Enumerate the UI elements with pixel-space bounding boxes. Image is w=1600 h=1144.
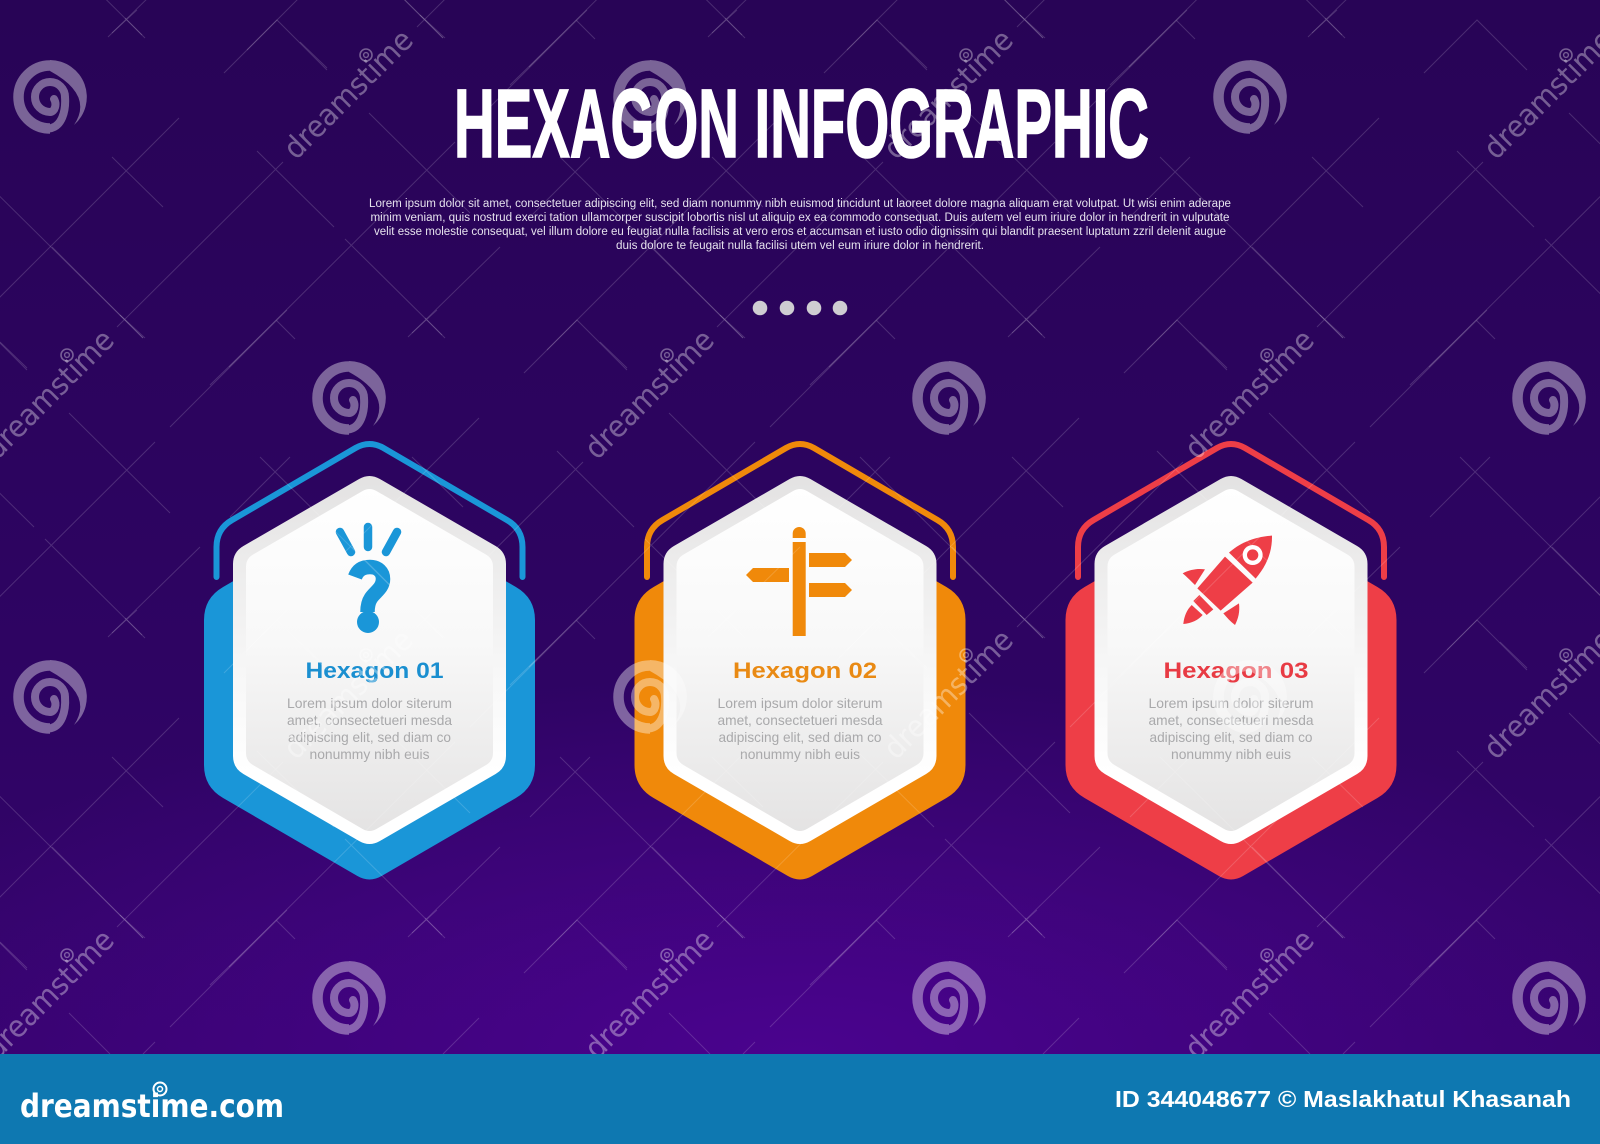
card inner: [676, 489, 924, 831]
intro text block: Lorem ipsum dolor sit amet, consectetuer adipiscing elit, sed diam nonummy nibh euismod tincidunt ut laoreet dolore magna aliquam erat volutpat. Ut wisi enim aderape: [369, 198, 1231, 210]
description: Lorem ipsum dolor siterum: [718, 695, 882, 711]
icon: signpost: [746, 527, 852, 636]
intro text block: minim veniam, quis nostrud exerci tation ullamcorper suscipit lobortis nisl ut aliquip ex ea commodo consequat. Duis autem vel eum iriure dolor in hendrerit in vulputate: [370, 212, 1230, 224]
outline bracket orange: [647, 444, 953, 577]
watermark overlay: dreamstime: [1178, 323, 1321, 466]
intro text block: velit esse molestie consequat, vel illum dolore eu feugiat nulla facilisis at vero eros et accumsan et iusto odio dignissim qui blandit praesent luptatum zzril delenit augue: [374, 226, 1226, 238]
footer logo: dreamstime.com: [20, 1087, 284, 1125]
card inner: [1108, 489, 1354, 831]
card inner: [246, 489, 493, 831]
watermark overlay: dreamstime: [877, 623, 1020, 766]
watermark overlay: dreamstime: [277, 23, 420, 166]
card outer: [233, 476, 506, 844]
intro text block: [369, 198, 1231, 252]
description: Lorem ipsum dolor siterum: [287, 695, 452, 711]
watermark overlay: dreamstime: [277, 623, 420, 766]
back hexagon orange: [634, 506, 966, 880]
heading: Hexagon 01: [306, 658, 444, 683]
description: adipiscing elit, sed diam co: [288, 729, 451, 745]
outline bracket red: [1078, 444, 1384, 577]
description: amet, consectetueri mesda: [1148, 712, 1314, 728]
icon: question mark: [340, 527, 397, 633]
intro text block: duis dolore te feugait nulla facilisi utem vel eum iriure dolor in hendrerit.: [616, 240, 984, 252]
panel: hexagon 02: [634, 444, 966, 880]
heading: Hexagon 03: [1164, 658, 1308, 683]
footer bar: [0, 1054, 1600, 1144]
watermark overlay: dreamstime: [877, 23, 1020, 166]
description: Lorem ipsum dolor siterum: [1148, 695, 1314, 711]
watermark overlay: dreamstime: [578, 923, 721, 1066]
back hexagon red: [1066, 506, 1396, 880]
description: nonummy nibh euis: [1171, 746, 1291, 762]
footer credit: ID 344048677 © Maslakhatul Khasanah: [1115, 1086, 1571, 1112]
description: amet, consectetueri mesda: [718, 712, 883, 728]
heading: Hexagon 02: [733, 658, 877, 683]
description: [287, 695, 452, 762]
card outer: [664, 476, 936, 844]
card outer: [1094, 476, 1368, 844]
description: amet, consectetueri mesda: [287, 712, 452, 728]
watermark overlay: dreamstime: [1178, 923, 1321, 1066]
panel: hexagon 03: [1066, 444, 1396, 880]
description: adipiscing elit, sed diam co: [1150, 729, 1313, 745]
description: [718, 695, 883, 762]
panel: hexagon 01: [204, 444, 535, 880]
outline bracket blue: [216, 444, 522, 577]
description: adipiscing elit, sed diam co: [718, 729, 882, 745]
back hexagon blue: [204, 506, 535, 880]
description: nonummy nibh euis: [310, 746, 430, 762]
pagination dots: [753, 301, 847, 315]
icon: rocket: [1183, 536, 1272, 625]
description: nonummy nibh euis: [740, 746, 860, 762]
description: [1148, 695, 1314, 762]
watermark overlay: dreamstime: [578, 323, 721, 466]
